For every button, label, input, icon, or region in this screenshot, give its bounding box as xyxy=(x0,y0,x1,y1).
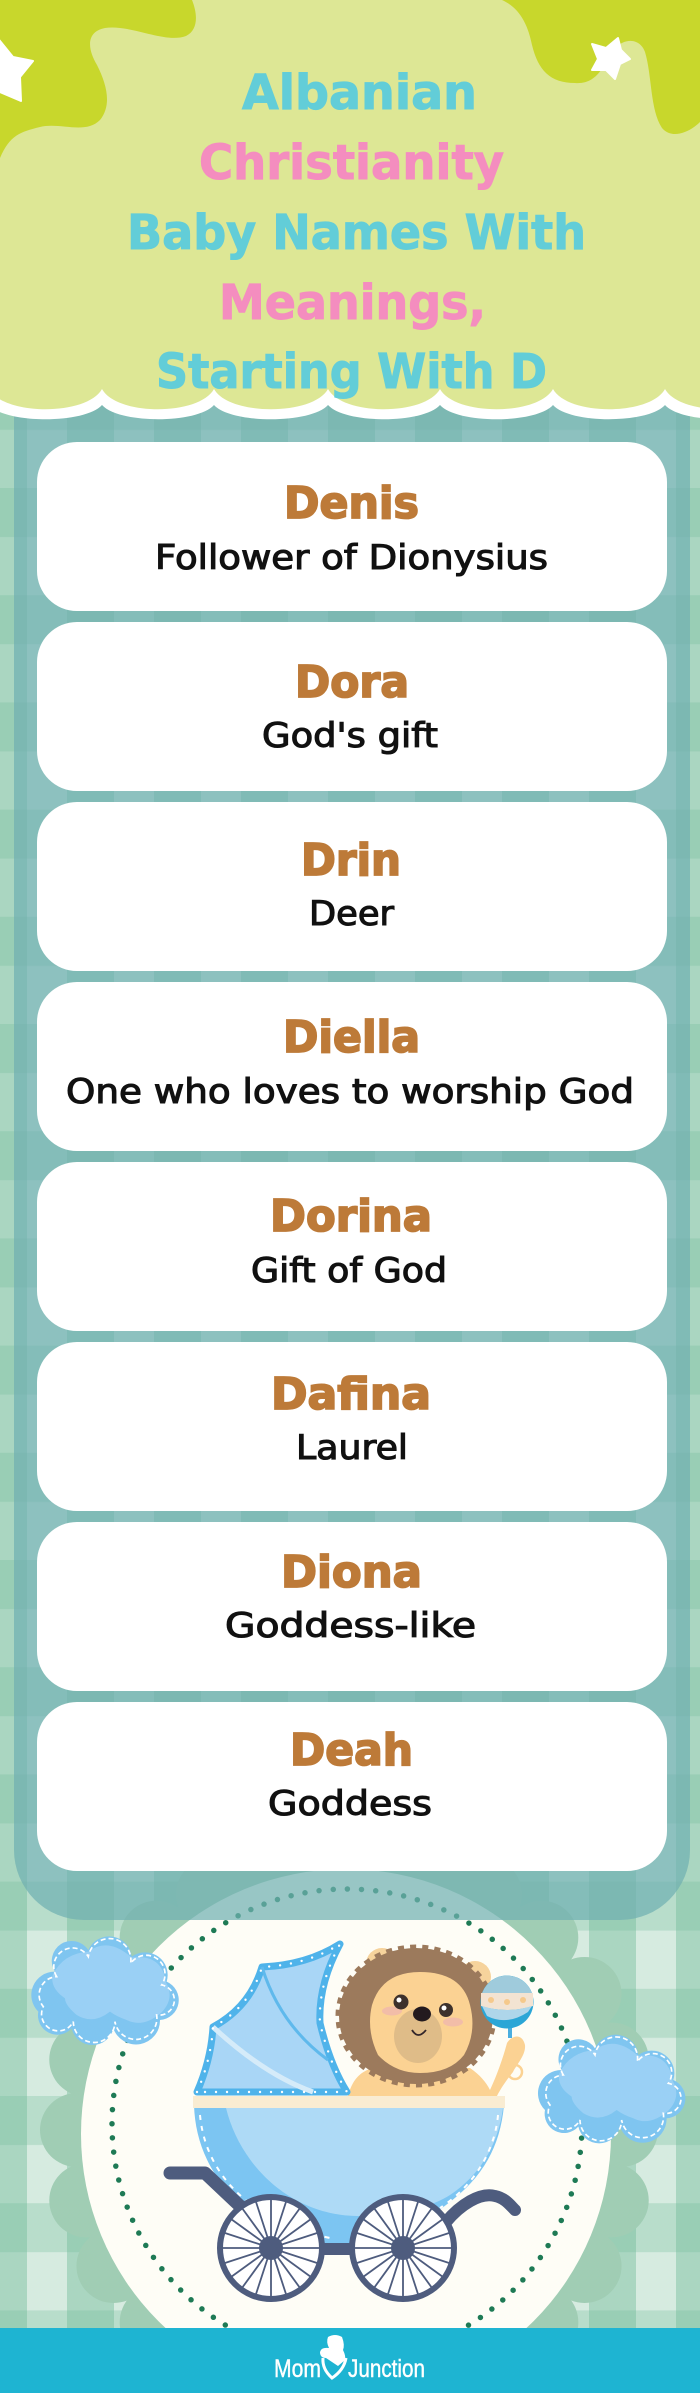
illustration: stroller frame xyxy=(170,2173,515,2249)
title: Christianity xyxy=(199,135,504,191)
footer logo xyxy=(274,2335,425,2383)
card: Dafina: Dafina xyxy=(271,1369,431,1420)
icon: star right xyxy=(592,38,630,79)
title: Meanings, xyxy=(219,275,486,331)
title xyxy=(127,65,586,400)
icon: cloud right xyxy=(538,2035,685,2143)
card: Dorina xyxy=(37,1162,667,1331)
card: Deah: Deah xyxy=(290,1725,413,1776)
dotted ring xyxy=(112,1889,582,2359)
card: Dorina: Dorina xyxy=(270,1191,432,1242)
icon: cloud left xyxy=(31,1936,179,2045)
card: Denis: Follower of Dionysius xyxy=(155,538,548,578)
footer bar xyxy=(0,2328,700,2393)
header background xyxy=(0,0,700,419)
card: Drin: Deer xyxy=(309,894,394,934)
title: Albanian xyxy=(242,65,477,121)
card: Drin: Drin xyxy=(301,835,401,886)
large cream circle xyxy=(81,1869,611,2393)
card: Deah: Goddess xyxy=(268,1784,432,1824)
title: Starting With D xyxy=(156,344,547,400)
card: Diella: Diella xyxy=(283,1012,420,1063)
header green corner right xyxy=(502,0,700,134)
card: Diona: Goddess-like xyxy=(225,1606,476,1646)
card: Dorina: Gift of God xyxy=(251,1251,447,1291)
illustration: lion xyxy=(339,1948,525,2096)
footer logo: Mom xyxy=(274,2355,321,2383)
icon: wheel right xyxy=(352,2197,454,2299)
scalloped green blob behind circle xyxy=(77,1858,621,2393)
card: Denis: Denis xyxy=(284,478,419,529)
icon: wheel left xyxy=(220,2197,322,2299)
card: Dora: Dora xyxy=(295,657,409,708)
card: Denis xyxy=(37,442,667,611)
card: Diella: One who loves to worship God xyxy=(66,1072,634,1112)
card: Drin xyxy=(37,802,667,971)
card: Diona: Diona xyxy=(281,1547,422,1598)
card: Diella xyxy=(37,982,667,1151)
icon: star left xyxy=(0,36,33,101)
card: Dafina xyxy=(37,1342,667,1511)
illustration: stroller basket xyxy=(193,2096,505,2246)
card: Dora: God's gift xyxy=(262,716,438,756)
card: Deah xyxy=(37,1702,667,1871)
footer logo: Junction xyxy=(348,2355,425,2383)
card: Diona xyxy=(37,1522,667,1691)
icon: rattle xyxy=(480,1976,534,2038)
title: Baby Names With xyxy=(127,205,586,261)
translucent teal panel xyxy=(14,400,690,1920)
illustration: stroller canopy xyxy=(197,1944,347,2092)
card: Dora xyxy=(37,622,667,791)
header green corner left xyxy=(0,0,196,158)
card: Dafina: Laurel xyxy=(296,1428,408,1468)
